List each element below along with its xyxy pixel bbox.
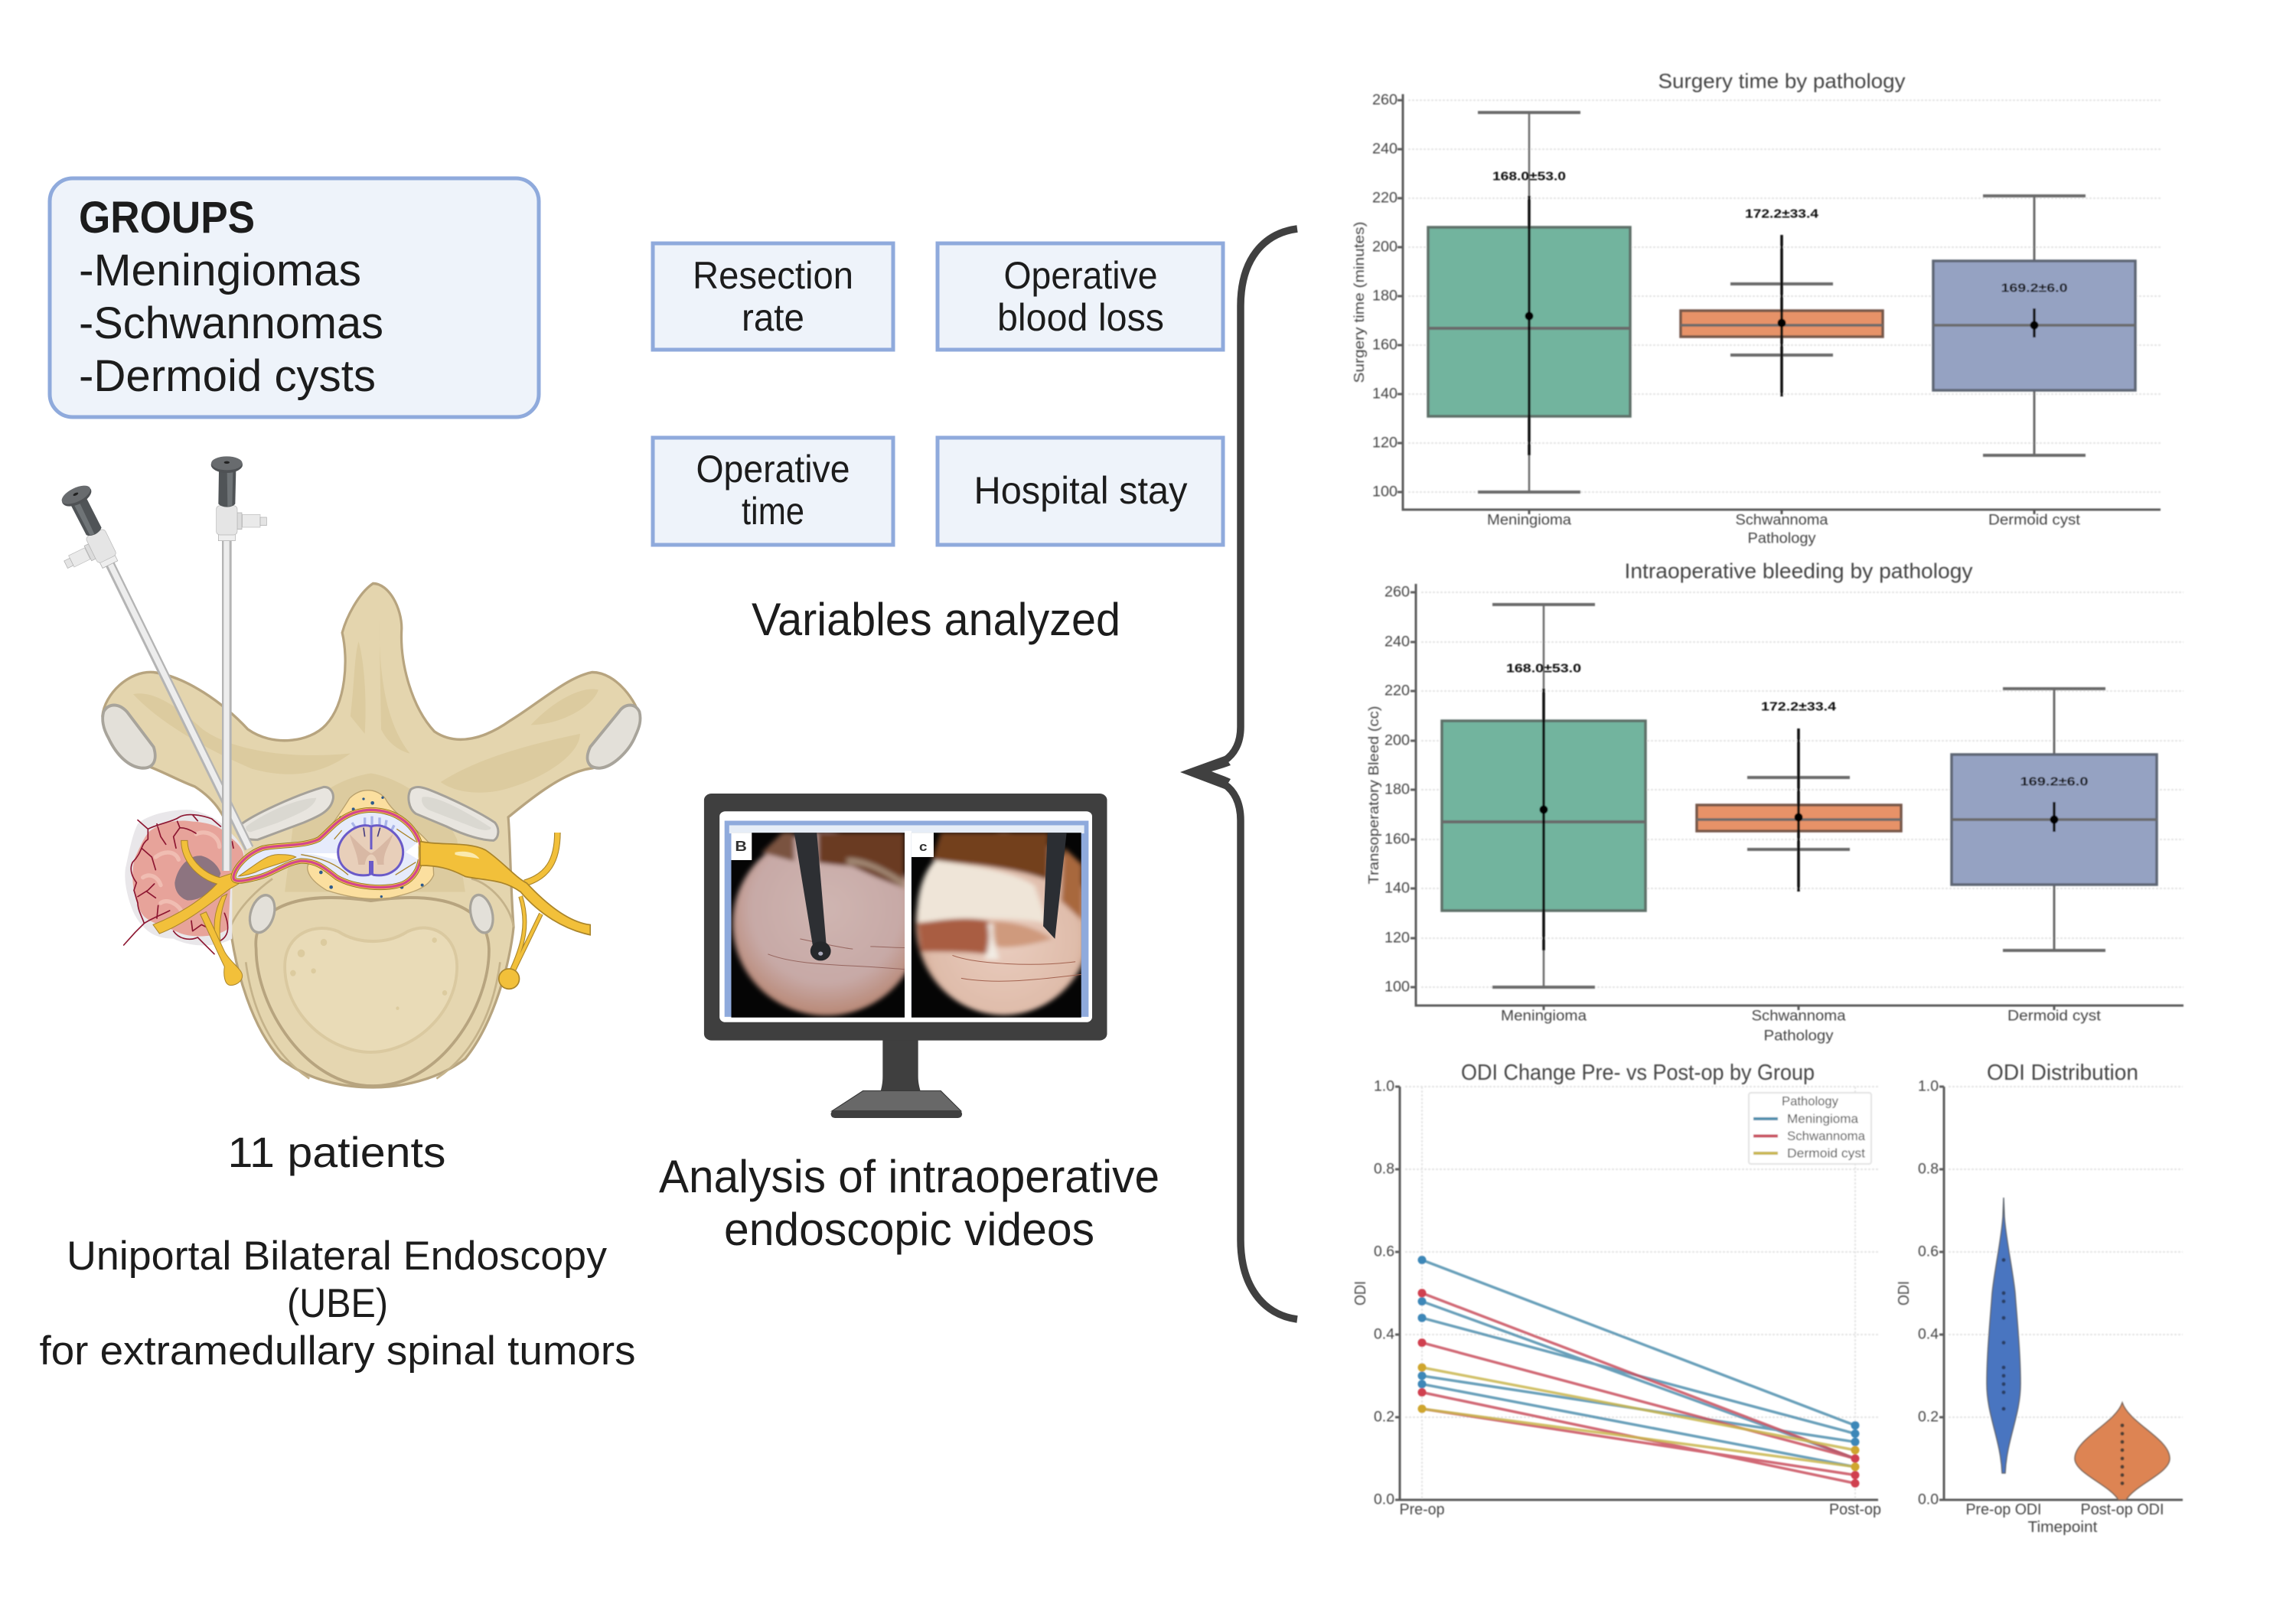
- variable box: operative time: [653, 438, 893, 545]
- y axis: 180: [1372, 288, 1397, 305]
- box: schwannoma: [1681, 208, 1883, 396]
- facet: upper left: [240, 787, 333, 839]
- y axis: 240: [1384, 634, 1410, 650]
- box: meningioma: 168.0±53.0: [1492, 170, 1566, 184]
- axes: Post-op ODI: [2080, 1501, 2164, 1518]
- spinal cord: [338, 826, 403, 875]
- y axis: 120: [1372, 435, 1397, 451]
- y axis: 160: [1384, 831, 1410, 848]
- x axis labels: Pathology: [1763, 1028, 1834, 1044]
- box: schwannoma: 172.2±33.4: [1761, 701, 1836, 713]
- axes: Pre-op ODI: [1965, 1501, 2042, 1518]
- variable box: operative blood loss: [938, 243, 1223, 350]
- screen: [719, 811, 1092, 1022]
- vertebra bone: [103, 584, 641, 1087]
- y axis: 240: [1372, 141, 1397, 158]
- endoscopic photo B: [731, 832, 920, 1018]
- chart title: Surgery time by pathology: [1658, 70, 1906, 93]
- axes: Pre-op: [1399, 1501, 1445, 1518]
- x axis labels: Pathology: [1748, 531, 1816, 546]
- axes: 0.8: [1374, 1162, 1394, 1177]
- endoscopic photo C: [912, 832, 1091, 1018]
- x axis labels: [1487, 513, 2081, 546]
- chart: surgery time by pathology: [1352, 70, 2161, 546]
- y axis: 260: [1372, 92, 1397, 109]
- photo C label: [912, 833, 934, 857]
- axes: 0.4: [1374, 1327, 1394, 1342]
- chart title: Intraoperative bleeding by pathology: [1624, 559, 1973, 583]
- monitor frame: [704, 794, 1107, 1041]
- lines: meningioma: [1417, 1256, 1860, 1467]
- y axis: 200: [1384, 733, 1410, 748]
- text: procedure description: for extramedullary spinal tumors: [40, 1328, 636, 1374]
- chart title: ODI Distribution: [1987, 1061, 2138, 1085]
- box: dermoid cyst: 169.2±6.0: [2001, 282, 2068, 295]
- axes: 1.0: [1918, 1079, 1939, 1094]
- variable box: operative blood loss: blood loss: [997, 296, 1164, 339]
- variable box: operative time: Operative: [696, 448, 850, 491]
- y axis: 160: [1372, 337, 1397, 354]
- violin: pre-op: [1987, 1198, 2020, 1473]
- variable box: resection rate: Resection: [693, 254, 853, 297]
- vertebral body: [256, 898, 489, 1086]
- nerve root: right: [420, 833, 590, 989]
- variable box: operative blood loss: Operative: [1004, 254, 1157, 297]
- axes: [1352, 1079, 1881, 1518]
- axes: 0.4: [1918, 1327, 1939, 1342]
- variable box: hospital stay: Hospital stay: [974, 469, 1188, 512]
- x axis labels: [1501, 1009, 2102, 1044]
- text: dermoid cysts: -Dermoid cysts: [79, 351, 376, 401]
- chart: ODI change pre vs post-op: [1352, 1061, 1881, 1518]
- axes: Timepoint: [2028, 1519, 2098, 1536]
- axes: ODI: [1896, 1281, 1913, 1305]
- tumor with left nerve root: [124, 810, 244, 985]
- x axis labels: Meningioma: [1501, 1009, 1587, 1024]
- y axis: 260: [1384, 585, 1410, 600]
- illustration: vertebra with endoscopes and tumor: [38, 456, 641, 1087]
- photo C label: c: [919, 839, 928, 854]
- y axis: 220: [1384, 683, 1410, 699]
- axes: [1896, 1079, 2183, 1536]
- y axis: 140: [1372, 386, 1397, 403]
- axes: Post-op: [1829, 1501, 1881, 1518]
- text: schwannomas: -Schwannomas: [79, 298, 383, 348]
- heading: groups: GROUPS: [79, 193, 255, 243]
- text: meningiomas: -Meningiomas: [79, 246, 361, 295]
- x axis labels: Dermoid cyst: [2007, 1009, 2102, 1024]
- facet: left transverse: [103, 706, 155, 768]
- y axis: 220: [1372, 190, 1397, 207]
- x axis labels: Dermoid cyst: [1988, 513, 2081, 528]
- panel: groups: [50, 178, 539, 417]
- legend: Dermoid cyst: [1787, 1146, 1865, 1160]
- x axis labels: Schwannoma: [1736, 513, 1828, 528]
- variable box: resection rate: [653, 243, 893, 350]
- variable box: operative time: time: [742, 490, 804, 533]
- y axis: Transoperatory Bleed (cc): [1366, 706, 1381, 885]
- box: schwannoma: [1697, 701, 1901, 892]
- facet: lower left: [246, 892, 279, 936]
- axes: 0.2: [1374, 1410, 1394, 1425]
- caption: variables analyzed: Variables analyzed: [752, 594, 1120, 645]
- facet: lower right: [467, 892, 497, 935]
- legend: Schwannoma: [1787, 1129, 1866, 1143]
- y axis: [1366, 584, 2183, 1010]
- lines: schwannoma: [1417, 1289, 1860, 1488]
- text: 11 patients: 11 patients: [228, 1128, 445, 1176]
- text: procedure description: Uniportal Bilateral Endoscopy: [67, 1234, 608, 1279]
- y axis: 120: [1384, 931, 1410, 946]
- axes: 0.6: [1374, 1244, 1394, 1260]
- text: procedure description: (UBE): [287, 1281, 388, 1326]
- variable box: hospital stay: [938, 438, 1223, 545]
- x axis labels: Schwannoma: [1751, 1009, 1846, 1024]
- screen blue window: [725, 820, 1088, 1017]
- box: dermoid cyst: [1952, 689, 2157, 950]
- photo B label: B: [735, 839, 747, 855]
- facet: right transverse: [588, 706, 641, 768]
- caption: analysis of videos: endoscopic videos: [724, 1204, 1094, 1255]
- y axis: Surgery time (minutes): [1352, 222, 1367, 383]
- dural sleeve: [233, 810, 421, 888]
- chart: ODI distribution violin: [1896, 1061, 2183, 1536]
- box: meningioma: 168.0±53.0: [1506, 663, 1581, 675]
- epidural fat: [308, 790, 434, 899]
- axes: 0.6: [1918, 1244, 1939, 1260]
- rootlets: [352, 817, 394, 830]
- x axis labels: Meningioma: [1487, 513, 1571, 528]
- chart title: ODI Change Pre- vs Post-op by Group: [1461, 1061, 1815, 1085]
- caption: analysis of videos: [659, 1151, 1159, 1255]
- y axis: 100: [1372, 484, 1397, 500]
- monitor stand: [831, 1039, 962, 1118]
- endoscope: vertical: [211, 456, 266, 871]
- axes: 1.0: [1374, 1079, 1394, 1094]
- variable box: resection rate: rate: [742, 296, 804, 339]
- box: meningioma: [1442, 605, 1645, 987]
- legend: Pathology: [1782, 1094, 1838, 1108]
- legend: Meningioma: [1787, 1111, 1859, 1126]
- text: procedure description: [40, 1234, 636, 1374]
- axes: 0.0: [1374, 1492, 1394, 1508]
- nerve rootlet in sleeve: [239, 855, 296, 876]
- box: meningioma: [1428, 112, 1630, 492]
- axes: 0.2: [1918, 1410, 1939, 1425]
- violin: post-op: [2075, 1403, 2170, 1500]
- curly brace: [1180, 229, 1297, 1319]
- y axis: 200: [1372, 239, 1397, 256]
- icon: monitor with endoscopic video frames: [704, 794, 1107, 1118]
- box: dermoid cyst: [1933, 196, 2135, 455]
- box: dermoid cyst: 169.2±6.0: [2020, 776, 2089, 788]
- axes: 0.8: [1918, 1162, 1939, 1177]
- chart: intraoperative bleeding by pathology: [1366, 559, 2183, 1044]
- photo B label: [731, 833, 752, 860]
- box: schwannoma: 172.2±33.4: [1745, 208, 1818, 220]
- y axis: [1352, 92, 2161, 514]
- axes: 0.0: [1918, 1492, 1939, 1508]
- y axis: 180: [1384, 782, 1410, 797]
- y axis: 100: [1384, 980, 1410, 995]
- axes: ODI: [1352, 1281, 1369, 1305]
- endoscope: angled: [38, 481, 263, 865]
- caption: analysis of videos: Analysis of intraoperative: [659, 1151, 1159, 1202]
- facet: upper right: [409, 787, 498, 840]
- y axis: 140: [1384, 880, 1410, 897]
- spinal canal detail: [233, 787, 498, 899]
- lines: dermoid cyst: [1417, 1364, 1860, 1471]
- legend: [1749, 1093, 1871, 1164]
